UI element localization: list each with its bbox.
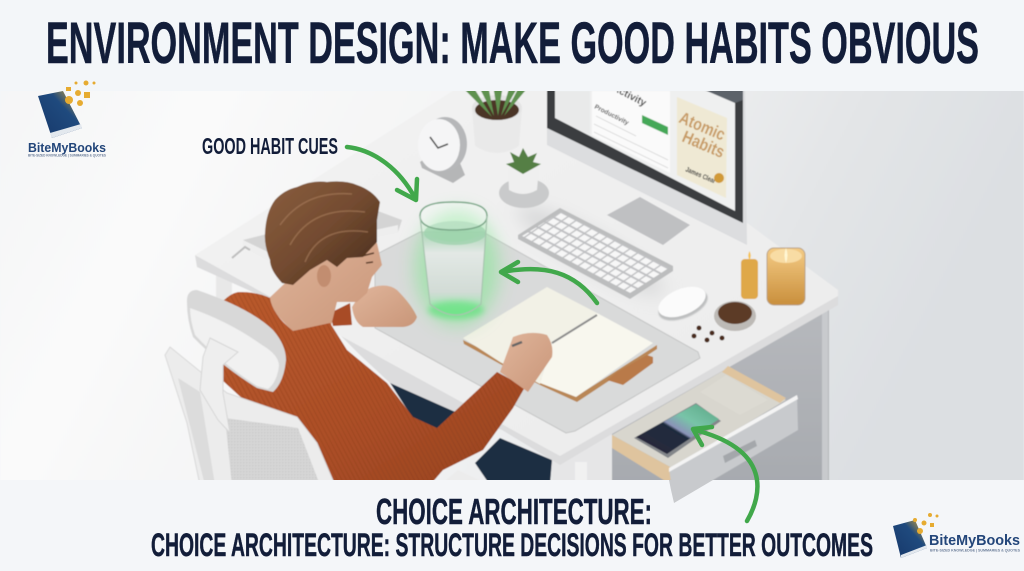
mouse <box>654 281 712 327</box>
screen: activity app panel <box>592 91 670 172</box>
pen <box>512 342 522 346</box>
chair back frame <box>165 347 335 485</box>
desk chair <box>165 290 335 485</box>
arrow: label to glass <box>347 147 417 200</box>
screen: Atomic Habits book cover: Habits <box>679 127 727 162</box>
person at desk <box>222 181 552 485</box>
desk cabinet <box>552 305 829 485</box>
screen: activity app panel: Activity <box>611 83 648 109</box>
screen: Atomic Habits book cover: James Clear <box>684 166 717 185</box>
label: good habit cues: GOOD HABIT CUES <box>202 133 338 159</box>
brand tagline: BITE-SIZED KNOWLEDGE | SUMMARIES & QUOTES <box>28 154 107 158</box>
screen: activity app panel: Productivity <box>593 104 630 127</box>
drawer with phone <box>612 366 798 503</box>
brand name: BiteMyBooks <box>929 532 1020 549</box>
bowl of coffee beans <box>692 301 756 342</box>
notebook strap <box>607 355 653 385</box>
icon: glass of water <box>420 202 487 319</box>
icon: idea sparks <box>65 80 96 106</box>
notebook and pen <box>463 287 657 402</box>
icon: clock <box>418 117 467 183</box>
hair <box>265 181 380 285</box>
chair mesh <box>178 378 215 485</box>
ear <box>317 265 331 287</box>
panel: top banner <box>0 0 1024 91</box>
glow around glass <box>415 210 499 326</box>
icon: book <box>893 520 927 558</box>
brand name: BiteMyBooks <box>28 140 106 155</box>
left cuff <box>330 303 352 326</box>
caption heading: CHOICE ARCHITECTURE: <box>376 491 652 532</box>
icon: smartphone <box>634 403 721 458</box>
left hand on mat <box>352 286 417 327</box>
right hand <box>500 333 552 392</box>
soft shadows on desk <box>507 192 673 308</box>
desk leg <box>216 268 232 302</box>
logo: bottom right <box>893 513 1021 558</box>
panel: workspace illustration <box>164 91 1024 480</box>
desk mat <box>375 232 700 433</box>
plant: large pot <box>460 85 530 153</box>
logo: top left <box>28 80 107 158</box>
notebook behind the man <box>232 208 402 262</box>
screen: Atomic Habits book cover <box>676 97 728 198</box>
desk top <box>195 85 838 465</box>
monitor <box>547 83 747 245</box>
neck and face <box>265 235 382 332</box>
sweater <box>222 292 525 485</box>
drawer front overlap <box>669 480 713 503</box>
chair seat <box>440 470 490 485</box>
plant: small succulent on coaster <box>499 148 549 208</box>
keyboard <box>518 208 673 299</box>
brand tagline: BITE-SIZED KNOWLEDGE | SUMMARIES & QUOTES <box>930 548 1021 552</box>
chair bracket <box>200 338 238 433</box>
candles <box>741 248 805 305</box>
trousers <box>385 375 552 485</box>
arrow: notebook to glass <box>501 262 597 303</box>
screen: Atomic Habits book cover: Atomic <box>676 108 728 144</box>
eye and brow <box>362 253 374 263</box>
icon: idea sparks <box>913 513 938 534</box>
arrow: banner to phone <box>693 427 757 521</box>
panel: bottom banner <box>0 480 1024 571</box>
chair headrest <box>187 290 286 392</box>
icon: book <box>38 91 82 138</box>
